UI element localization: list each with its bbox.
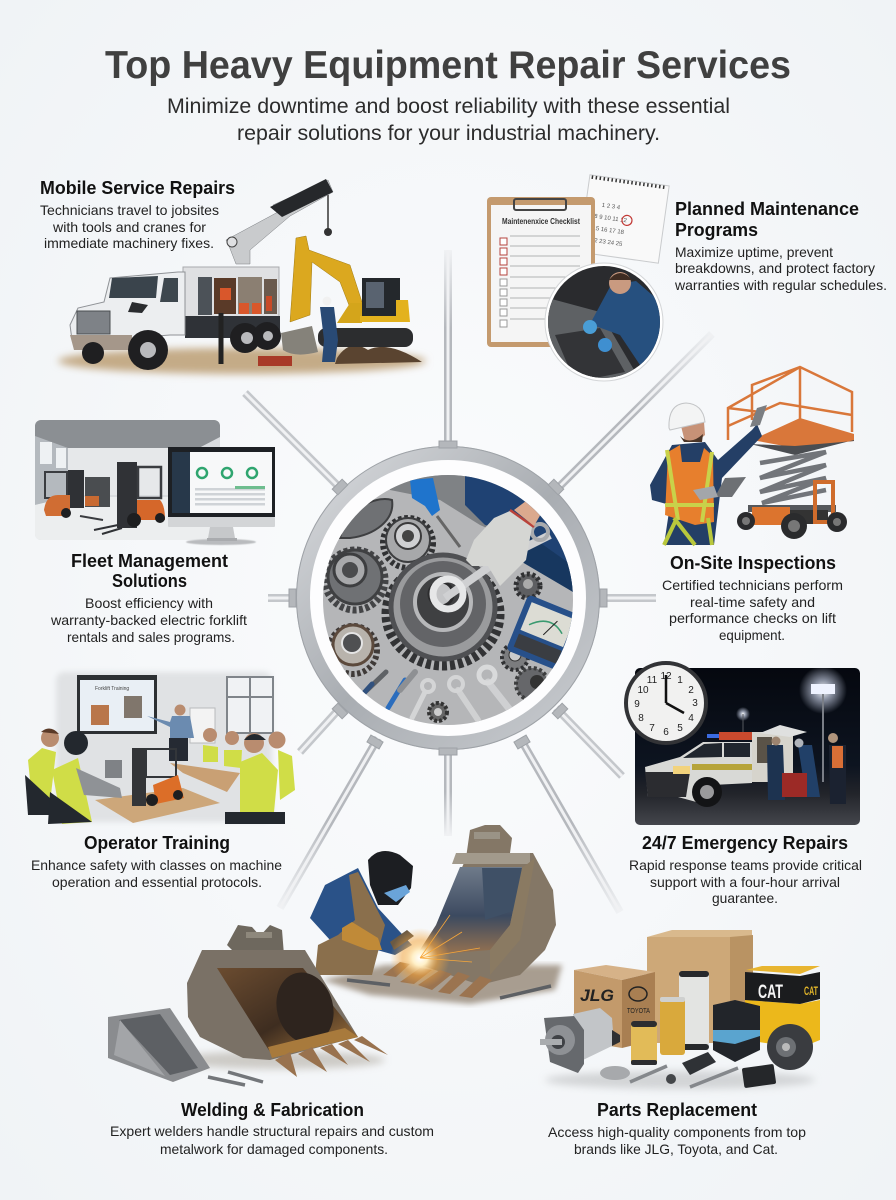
- heading: [71, 551, 228, 591]
- upper bucket: [420, 825, 556, 985]
- subtitle: Minimize downtime and boost reliability with these essential: [167, 95, 730, 118]
- title: Top Heavy Equipment Repair Services: [105, 44, 791, 87]
- description: Maximize uptime, prevent: [675, 244, 833, 260]
- description: warranty-backed electric forklift: [50, 612, 247, 628]
- filters: [679, 972, 709, 1049]
- spokes connecting hub to services: [245, 250, 712, 912]
- description: [50, 595, 247, 645]
- description: [40, 202, 219, 251]
- illustration: warehouse forklifts and dashboard monitor: [35, 420, 275, 545]
- illustration: night scene with clock: 4: [688, 713, 694, 724]
- wall clock: [626, 663, 706, 743]
- panel: on-site inspections: [650, 367, 854, 643]
- lower bucket: [175, 1051, 385, 1069]
- technician: [322, 296, 332, 306]
- small parts: [600, 1066, 630, 1080]
- description: [548, 1124, 806, 1157]
- description: support with a four-hour arrival: [650, 874, 840, 890]
- trainees: [28, 745, 295, 824]
- inspector: [650, 424, 762, 545]
- illustration: night scene with clock: 2: [688, 685, 694, 696]
- presenter: [174, 704, 186, 716]
- description: Boost efficiency with: [85, 595, 213, 611]
- forklift model: [132, 748, 146, 806]
- illustration: night scene with clock: [626, 663, 860, 825]
- lower bucket teeth: [275, 1036, 388, 1077]
- truck box: [183, 267, 279, 317]
- calendar: 8 9 10 11 12: [594, 214, 628, 224]
- heading: Operator Training: [84, 833, 230, 853]
- panel: welding and fabrication: [108, 825, 562, 1157]
- description: [662, 577, 843, 643]
- illustration: service truck and excavator: [58, 179, 426, 374]
- cardboard boxes: [647, 930, 752, 943]
- description: breakdowns, and protect factory: [675, 260, 875, 276]
- calendar: 15 16 17 18: [592, 226, 625, 236]
- description: [110, 1123, 434, 1157]
- monitor: [186, 539, 256, 545]
- table: [170, 763, 240, 792]
- description: immediate machinery fixes.: [44, 235, 214, 251]
- wrenches: [208, 1072, 263, 1085]
- description: operation and essential protocols.: [52, 874, 262, 890]
- subtitle: [167, 95, 730, 145]
- excavator: [290, 236, 363, 322]
- description: equipment.: [719, 627, 785, 643]
- illustration: checklist, calendar and mechanic: [487, 175, 669, 382]
- illustration: parts and branded boxes: CAT: [758, 982, 783, 1003]
- heading: Mobile Service Repairs: [40, 178, 235, 198]
- description: [629, 857, 862, 906]
- description: [31, 857, 282, 890]
- panel: parts replacement: [540, 930, 820, 1157]
- heading: Solutions: [112, 571, 187, 591]
- CAT box: [746, 966, 820, 974]
- calendar: [579, 175, 669, 263]
- subtitle: repair solutions for your industrial machinery.: [237, 122, 660, 145]
- illustration: night scene with clock: 7: [649, 723, 655, 734]
- illustration: night scene with clock: 6: [663, 727, 669, 738]
- heading: Programs: [675, 220, 758, 240]
- description: real-time safety and: [690, 594, 815, 610]
- wheels: [82, 322, 281, 370]
- description: brands like JLG, Toyota, and Cat.: [574, 1141, 778, 1157]
- description: Rapid response teams provide critical: [629, 857, 862, 873]
- calendar: 22 23 24 25: [590, 238, 623, 248]
- clipboard: [487, 197, 595, 347]
- bucket teeth: [383, 962, 492, 998]
- heading: Planned Maintenance: [675, 199, 859, 219]
- illustration: inspector and scissor lift: [650, 367, 854, 545]
- illustration: parts and branded boxes: JLG: [580, 986, 614, 1005]
- illustration: parts and branded boxes: [540, 930, 820, 1089]
- heading: Welding & Fabrication: [181, 1100, 364, 1120]
- heading: [675, 199, 859, 240]
- black part box: [713, 1000, 760, 1062]
- description: warranties with regular schedules.: [674, 277, 887, 293]
- illustration: classroom training: [25, 672, 295, 824]
- cab: [70, 272, 185, 340]
- back forklifts: [85, 477, 110, 507]
- heading: Fleet Management: [71, 551, 228, 571]
- illustration: night scene with clock: 11: [647, 675, 658, 686]
- metal bracket: [108, 1008, 210, 1082]
- description: Enhance safety with classes on machine: [31, 857, 282, 873]
- scattered tools: [347, 980, 551, 998]
- illustration: night scene with clock: 9: [634, 699, 640, 710]
- illustration: checklist, calendar and mechanic: Maintenenxice Checklist: [502, 216, 580, 226]
- description: [674, 244, 887, 293]
- scissor lift: [728, 367, 852, 440]
- illustration: welder, buckets and bracket: [108, 825, 562, 1085]
- illustration: parts and branded boxes: CAT: [804, 984, 818, 998]
- central hub: gear repair photo in metal ring: [289, 441, 607, 755]
- illustration: night scene with clock: 1: [677, 675, 683, 686]
- calendar: 1 2 3 4: [601, 203, 621, 211]
- heading: Parts Replacement: [597, 1100, 757, 1120]
- illustration: night scene with clock: 5: [677, 723, 683, 734]
- description: guarantee.: [712, 890, 778, 906]
- panel: 24/7 emergency repairs: [626, 663, 862, 906]
- hydraulic pump: [573, 1008, 614, 1060]
- description: Access high-quality components from top: [548, 1124, 806, 1140]
- work table: [322, 965, 562, 1004]
- illustration: night scene with clock: 3: [692, 698, 698, 709]
- sparks: [420, 915, 480, 962]
- circular mechanic photo: [545, 263, 663, 381]
- description: performance checks on lift: [669, 610, 836, 626]
- description: metalwork for damaged components.: [160, 1141, 388, 1157]
- welder: [310, 868, 412, 975]
- illustration: classroom training: Forklift Training: [95, 686, 129, 692]
- illustration: night scene with clock: 8: [638, 713, 644, 724]
- description: Technicians travel to jobsites: [40, 202, 219, 218]
- heading: 24/7 Emergency Repairs: [642, 833, 848, 853]
- panel: fleet management solutions: [35, 420, 275, 645]
- heading: On-Site Inspections: [670, 553, 836, 573]
- description: rentals and sales programs.: [67, 629, 235, 645]
- description: with tools and cranes for: [52, 219, 206, 235]
- illustration: night scene with clock: 10: [637, 685, 649, 696]
- panel: planned maintenance programs: [487, 175, 887, 382]
- motor part: [767, 1024, 813, 1070]
- panel: mobile service repairs: [40, 178, 426, 374]
- description: Expert welders handle structural repairs and custom: [110, 1123, 434, 1139]
- illustration: parts and branded boxes: TOYOTA: [627, 1008, 650, 1015]
- crane: [226, 180, 333, 264]
- illustration: night scene with clock: 12: [660, 671, 672, 682]
- panel: operator training: [25, 672, 295, 890]
- description: Certified technicians perform: [662, 577, 843, 593]
- front forklift: [117, 462, 137, 528]
